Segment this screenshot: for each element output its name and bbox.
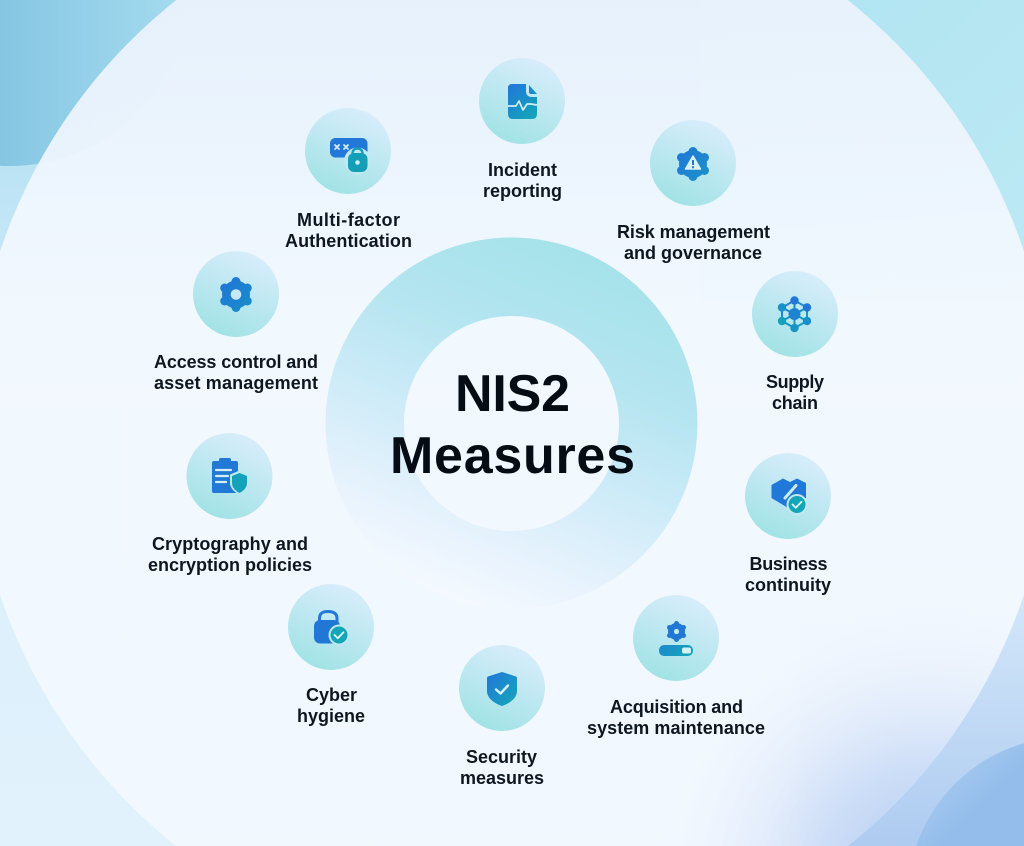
badge circle (633, 595, 719, 681)
item: acquisition and system maintenance (587, 595, 765, 738)
bottom-right corner tint (800, 560, 1024, 846)
item: business continuity (745, 453, 831, 595)
label (617, 222, 770, 263)
label: continuity (745, 575, 831, 595)
item: security measures (459, 645, 545, 788)
label: Access control and (154, 352, 318, 372)
label (483, 160, 562, 201)
title (390, 365, 635, 485)
badge circle (305, 108, 391, 194)
item: cryptography and encryption policies (148, 433, 312, 575)
icon: password and lock (330, 138, 371, 174)
icon: gear (220, 277, 252, 312)
icon: document with pulse (508, 84, 537, 119)
bottom-right corner circle (916, 743, 1024, 846)
item: cyber hygiene (288, 584, 374, 726)
badge circle (752, 271, 838, 357)
icon: padlock with check (314, 612, 350, 646)
label: Incident (488, 160, 557, 180)
icon: clipboard and shield (212, 458, 249, 495)
label (587, 697, 765, 738)
badge circle (186, 433, 272, 519)
item: supply chain (752, 271, 838, 413)
badge circle (745, 453, 831, 539)
bottom-right glow inside circle (600, 560, 1024, 846)
label: Acquisition and (610, 697, 743, 717)
item: access control and asset management (154, 251, 318, 393)
badge circle (288, 584, 374, 670)
label: asset management (154, 373, 318, 393)
label: Supply (766, 372, 824, 392)
label (154, 352, 318, 393)
label (460, 747, 544, 788)
label: Risk management (617, 222, 770, 242)
badge circle (479, 58, 565, 144)
icon: link shield with check (772, 478, 808, 515)
label: Authentication (285, 231, 412, 251)
label (745, 554, 831, 595)
label: reporting (483, 181, 562, 201)
top-right corner tint (700, 0, 1024, 300)
icon: warning gear (677, 147, 709, 181)
icon: gear and bar (659, 621, 693, 656)
label: Business (750, 554, 828, 574)
icon: network hexagon (778, 296, 811, 332)
label: measures (460, 768, 544, 788)
item: multi-factor authentication (285, 108, 412, 251)
badge circle (193, 251, 279, 337)
label: and governance (624, 243, 762, 263)
badge circle (650, 120, 736, 206)
icon: shield with check (487, 672, 517, 706)
item: incident reporting (479, 58, 565, 201)
label: Cryptography and (152, 534, 308, 554)
label (148, 534, 312, 575)
label: chain (772, 393, 818, 413)
label: Security (466, 747, 537, 767)
label: encryption policies (148, 555, 312, 575)
central ring (326, 238, 698, 610)
label (297, 685, 365, 726)
label (285, 210, 412, 251)
label (766, 372, 824, 413)
label: hygiene (297, 706, 365, 726)
top-left corner circle (0, 0, 190, 166)
badge circle (459, 645, 545, 731)
label: system maintenance (587, 718, 765, 738)
label: Multi-factor (297, 210, 400, 230)
title: Measures (390, 427, 635, 485)
title: NIS2 (455, 365, 570, 423)
item: risk management (617, 120, 770, 263)
label: Cyber (306, 685, 357, 705)
